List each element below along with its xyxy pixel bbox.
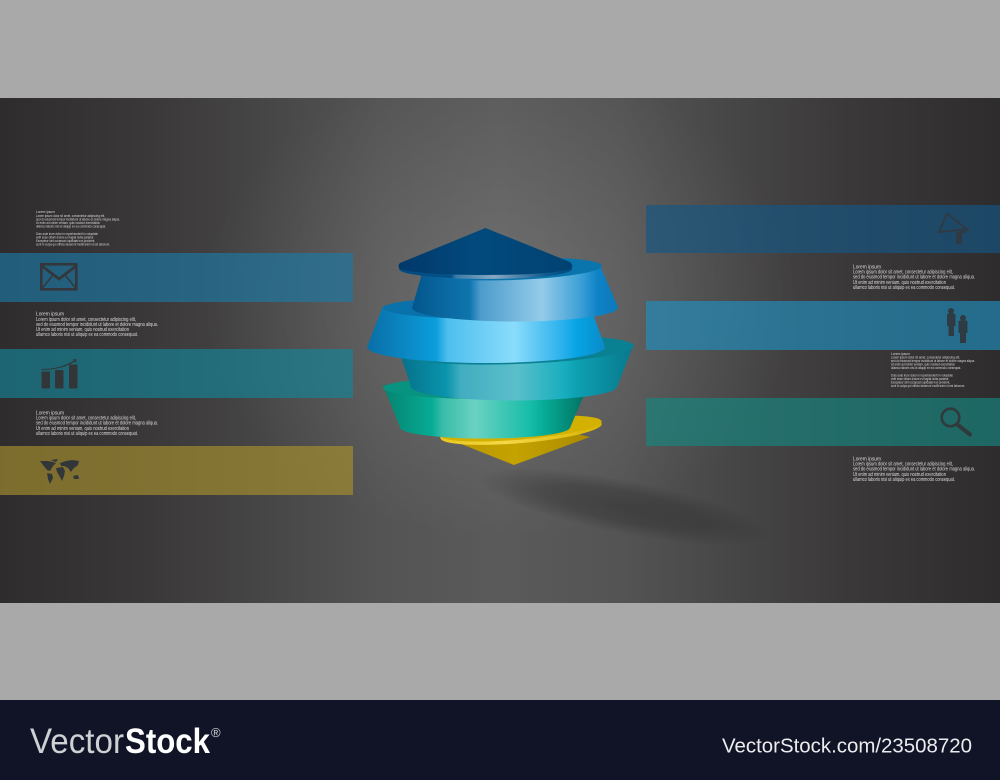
- slice: dark blue band: [412, 255, 618, 322]
- right bar 2: [646, 301, 1000, 350]
- text block: right 3: ullamco laboris nisi ut aliquip ex ea commodo consequat.: [853, 477, 955, 483]
- text block: left 3: Lorem ipsum: [36, 410, 64, 416]
- text block: left 2: Lorem ipsum dolor sit amet, consectetur adipiscing elit,: [36, 317, 136, 323]
- text block: left 3: ullamco laboris nisi ut aliquip ex ea commodo consequat.: [36, 431, 138, 437]
- text block: left 1: sed do eiusmod tempor incididunt ut labore et dolore magna aliqua.: [36, 218, 120, 222]
- text block: left 3: Ut enim ad minim veniam, quis nostrud exercitation: [36, 426, 129, 432]
- icon: envelope: [41, 264, 76, 289]
- slice: top cone: [398, 228, 572, 279]
- footer logo: VectorStock: Vector: [30, 722, 124, 761]
- text block: right 2: Duis aute irure dolor in reprehenderit in voluptate: [891, 374, 953, 378]
- text block: right 2: Excepteur sint occaecat cupidatat non proident,: [891, 380, 950, 384]
- text block: right 1: Ut enim ad minim veniam, quis nostrud exercitation: [853, 280, 946, 286]
- footer logo: VectorStock: [30, 722, 221, 761]
- text block: right 2: Ut enim ad minim veniam, quis nostrud exercitation: [891, 362, 955, 366]
- text block: left 1: velit esse cillum dolore eu fugiat nulla pariatur.: [36, 236, 94, 240]
- footer bar: [0, 700, 1000, 780]
- text block: right 2: Lorem ipsum dolor sit amet, consectetur adipiscing elit,: [891, 356, 960, 360]
- text block: right 1: ullamco laboris nisi ut aliquip ex ea commodo consequat.: [853, 285, 955, 291]
- text block: right 1: Lorem ipsum dolor sit amet, consectetur adipiscing elit,: [853, 270, 953, 276]
- text block: right 2: [891, 352, 975, 388]
- dark gradient panel: [0, 98, 1000, 603]
- text block: right 3: sed do eiusmod tempor incididunt ut labore et dolore magna aliqua.: [853, 466, 975, 472]
- slice: yellow bottom cone: [439, 410, 603, 465]
- 3D sliced sphere: [367, 228, 634, 465]
- text block: left 1: Excepteur sint occaecat cupidatat non proident,: [36, 239, 95, 243]
- icon: world map: [40, 459, 79, 484]
- text block: left 2: sed do eiusmod tempor incididunt ut labore et dolore magna aliqua.: [36, 322, 158, 328]
- left bar 1: [0, 253, 353, 302]
- text block: left 2: Lorem ipsum: [36, 312, 64, 318]
- text block: left 2: ullamco laboris nisi ut aliquip ex ea commodo consequat.: [36, 332, 138, 338]
- footer logo: VectorStock: ®: [211, 725, 221, 740]
- text block: left 1: ullamco laboris nisi ut aliquip ex ea commodo consequat.: [36, 224, 106, 228]
- icon: bar chart with arrow: [42, 359, 78, 388]
- bottom grey strip: [0, 603, 1000, 700]
- icon: people: [947, 308, 968, 343]
- text block: left 1: Lorem ipsum: [36, 210, 55, 214]
- text block: right 2: Lorem ipsum: [891, 352, 910, 356]
- 3D shape shadow: [473, 452, 777, 562]
- slice: teal band: [398, 332, 634, 401]
- text block: left 1: sunt in culpa qui officia deserunt mollit anim id est laborum.: [36, 242, 110, 246]
- text block: right 3: Ut enim ad minim veniam, quis nostrud exercitation: [853, 472, 946, 478]
- text block: right 3: Lorem ipsum: [853, 456, 881, 462]
- text block: left 3: Lorem ipsum dolor sit amet, consectetur adipiscing elit,: [36, 416, 136, 422]
- text block: right 2: ullamco laboris nisi ut aliquip ex ea commodo consequat.: [891, 366, 961, 370]
- text block: right 3: [853, 456, 975, 483]
- text block: right 2: sunt in culpa qui officia deserunt mollit anim id est laborum.: [891, 384, 965, 388]
- text block: left 3: [36, 410, 158, 437]
- left bar 2: [0, 349, 353, 398]
- text block: left 2: [36, 312, 158, 338]
- right bar 1: [646, 205, 1000, 253]
- right bar 3: [646, 398, 1000, 446]
- top grey strip: [0, 0, 1000, 98]
- icon: megaphone: [939, 214, 969, 244]
- slice: light blue band: [367, 297, 605, 363]
- icon: magnifier: [942, 409, 970, 434]
- footer logo: VectorStock: Stock: [125, 722, 210, 761]
- text block: left 2: Ut enim ad minim veniam, quis nostrud exercitation: [36, 327, 129, 333]
- text block: right 1: Lorem ipsum: [853, 264, 881, 270]
- slice: green band: [383, 377, 587, 439]
- text block: right 2: sed do eiusmod tempor incididunt ut labore et dolore magna aliqua.: [891, 359, 975, 363]
- text block: left 1: [36, 210, 120, 246]
- text block: right 1: [853, 264, 975, 291]
- footer id: VectorStock.com/23508720: VectorStock.com/23508720: [722, 734, 972, 758]
- text block: left 3: sed do eiusmod tempor incididunt ut labore et dolore magna aliqua.: [36, 420, 158, 426]
- text block: right 1: sed do eiusmod tempor incididunt ut labore et dolore magna aliqua.: [853, 274, 975, 280]
- text block: left 1: Ut enim ad minim veniam, quis nostrud exercitation: [36, 221, 100, 225]
- text block: right 2: velit esse cillum dolore eu fugiat nulla pariatur.: [891, 377, 949, 381]
- text block: left 1: Duis aute irure dolor in reprehenderit in voluptate: [36, 232, 98, 236]
- left bar 3: [0, 446, 353, 495]
- text block: left 1: Lorem ipsum dolor sit amet, consectetur adipiscing elit,: [36, 214, 105, 218]
- text block: right 3: Lorem ipsum dolor sit amet, consectetur adipiscing elit,: [853, 462, 953, 468]
